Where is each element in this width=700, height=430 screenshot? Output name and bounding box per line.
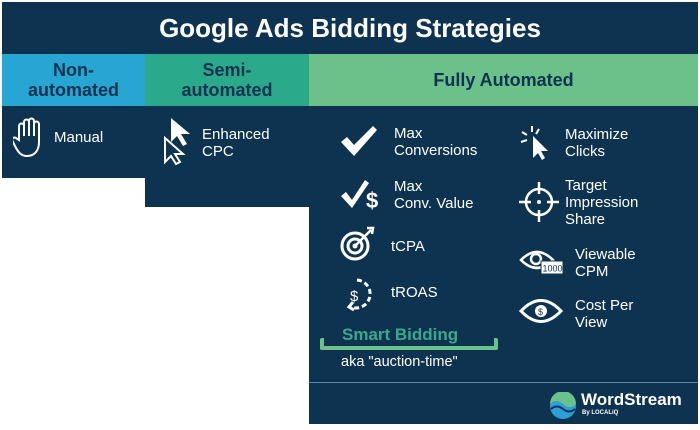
icon: dollar cycle <box>346 278 372 312</box>
text: tcpa: tCPA <box>391 238 425 255</box>
text: max conv value: Conv. Value <box>394 195 474 212</box>
text: max conversions: Conversions <box>394 142 477 159</box>
title: Google Ads Bidding Strategies <box>159 13 541 43</box>
text: cost per view: View <box>575 314 607 331</box>
text: maximize clicks <box>565 126 628 160</box>
header: fully automated <box>309 54 698 106</box>
logo: wordstream: By LOCALiQ <box>582 410 618 416</box>
icon: dollar cycle: $ <box>350 288 359 305</box>
panel: fully automated <box>309 106 698 424</box>
text: smart bidding: Smart Bidding <box>342 325 458 344</box>
icon: cursor <box>164 118 190 166</box>
icon: crosshair <box>519 182 559 222</box>
header: fully automated: Fully Automated <box>433 70 574 90</box>
header: non-automated <box>2 54 145 106</box>
text: max conversions: Max <box>394 125 422 142</box>
icon: click burst <box>520 126 548 160</box>
header: non-automated: Non- <box>53 60 94 80</box>
header: non-automated: automated <box>28 80 119 100</box>
text: target impression share <box>565 177 638 228</box>
text: cost per view: Cost Per <box>575 297 633 314</box>
panel: semi-automated <box>145 106 309 207</box>
text: manual: Manual <box>54 129 103 146</box>
text: maximize clicks: Clicks <box>565 143 605 160</box>
text: viewable cpm <box>575 246 636 280</box>
icon: eye dollar <box>519 299 563 323</box>
panel: non-automated <box>2 106 145 178</box>
text: cost per view <box>575 297 634 331</box>
icon: eye 1000: 1000 <box>542 264 563 274</box>
logo: wordstream: WordStream <box>581 390 682 409</box>
header: semi-automated <box>145 54 309 106</box>
icon: check <box>341 126 377 156</box>
text: max conv value: Max <box>394 178 422 195</box>
header: semi-automated: Semi- <box>202 60 252 80</box>
text: target impression share: Impression <box>565 194 638 211</box>
text: troas: tROAS <box>391 284 438 301</box>
text: max conv value <box>394 178 474 212</box>
icon: hand <box>13 118 40 157</box>
header: semi-automated: automated <box>181 80 272 100</box>
text: auction-time: aka "auction-time" <box>341 354 458 370</box>
text: enhanced cpc: CPC <box>202 143 234 160</box>
text: target impression share: Target <box>565 177 607 194</box>
text: maximize clicks: Maximize <box>565 126 628 143</box>
icon: eye 1000 <box>519 250 563 274</box>
text: viewable cpm: CPM <box>575 263 608 280</box>
text: enhanced cpc: Enhanced <box>202 126 270 143</box>
text: target impression share: Share <box>565 211 605 228</box>
icon: eye dollar: $ <box>538 307 543 317</box>
text: enhanced cpc <box>202 126 270 160</box>
icon: target <box>340 226 374 260</box>
text: viewable cpm: Viewable <box>575 246 636 263</box>
smart bidding bracket <box>320 325 498 350</box>
logo: wordstream <box>550 390 682 419</box>
text: max conversions <box>394 125 477 159</box>
title <box>2 2 698 54</box>
icon: check dollar <box>341 180 378 212</box>
